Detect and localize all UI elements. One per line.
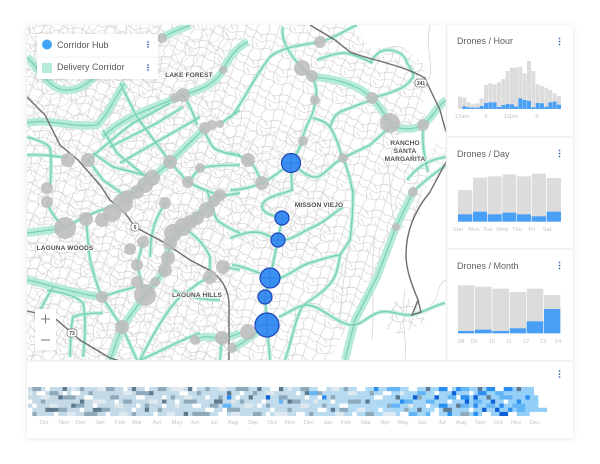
panel: map bbox=[27, 25, 446, 361]
panel: calendar heatmap: Mar bbox=[361, 420, 371, 426]
panel: calendar heatmap: Aug bbox=[456, 420, 466, 426]
panel: calendar heatmap: Jul bbox=[438, 420, 446, 426]
panel: drones per day: Sun bbox=[453, 227, 463, 233]
panel: drones per month: Drones / Month bbox=[457, 261, 519, 271]
panel: calendar heatmap: Dec bbox=[304, 420, 314, 426]
panel: calendar heatmap bbox=[28, 370, 560, 426]
panel: calendar heatmap: Feb bbox=[115, 420, 125, 426]
panel: calendar heatmap: Sep bbox=[248, 420, 258, 426]
highway shields: 73 bbox=[69, 331, 75, 337]
panel: drones per day: Thu bbox=[512, 227, 522, 233]
panel: drones per day: Sat bbox=[543, 227, 552, 233]
legend: Corridor Hub bbox=[57, 40, 109, 50]
panel: drones per hour: 6 bbox=[484, 114, 488, 120]
panel: drones per month bbox=[457, 261, 562, 345]
dividers bbox=[27, 25, 573, 361]
panel: drones per day: Mon bbox=[468, 227, 480, 233]
city labels: MARGARITA bbox=[385, 156, 425, 163]
panel: calendar heatmap: Sep bbox=[475, 420, 485, 426]
panel: calendar heatmap: Mar bbox=[132, 420, 142, 426]
panel: calendar heatmap: Apr bbox=[152, 420, 162, 426]
panel: drones per month: 09 bbox=[471, 339, 477, 345]
city labels: LAKE FOREST bbox=[165, 72, 213, 79]
panel: drones per day: Drones / Day bbox=[457, 149, 510, 159]
city labels: MISSON VIEJO bbox=[295, 202, 343, 209]
panel: calendar heatmap: Nov bbox=[285, 420, 295, 426]
legend bbox=[37, 34, 158, 79]
panel: calendar heatmap: Nov bbox=[511, 420, 521, 426]
panel: calendar heatmap: Jul bbox=[210, 420, 218, 426]
panel: drones per month: 10 bbox=[489, 339, 495, 345]
city labels: LAGUNA HILLS bbox=[172, 292, 223, 299]
panel: calendar heatmap: Jan bbox=[95, 420, 105, 426]
city labels: SANTA bbox=[394, 148, 416, 155]
panel: drones per month: 13 bbox=[540, 339, 546, 345]
panel: drones per month: 12 bbox=[523, 339, 529, 345]
panel: drones per day bbox=[453, 149, 561, 233]
panel: drones per day: Fri bbox=[529, 227, 535, 233]
panel: calendar heatmap: Nov bbox=[59, 420, 69, 426]
panel: calendar heatmap: Oct bbox=[493, 420, 503, 426]
corridor hubs: gray bbox=[41, 33, 429, 353]
panel: calendar heatmap: Jun bbox=[417, 420, 427, 426]
panel: drones per hour: Drones / Hour bbox=[457, 36, 513, 46]
panel: calendar heatmap: May bbox=[172, 420, 183, 426]
panel: drones per day: Tue bbox=[483, 227, 493, 233]
panel: drones per month: 14 bbox=[555, 339, 562, 345]
panel: drones per day: Wed bbox=[496, 227, 508, 233]
corridor hubs: blue bbox=[255, 154, 300, 337]
panel: drones per month: 08 bbox=[458, 339, 464, 345]
highway shields: 241 bbox=[417, 81, 425, 87]
panel: drones per hour: 12pm bbox=[504, 114, 518, 120]
legend: Delivery Corridor bbox=[57, 62, 125, 72]
panel: drones per hour: 6 bbox=[535, 114, 539, 120]
panel: drones per hour bbox=[455, 36, 561, 120]
highway shields bbox=[67, 79, 427, 337]
highways bbox=[27, 25, 446, 361]
city labels: RANCHO bbox=[390, 140, 420, 147]
panel: calendar heatmap: Dec bbox=[76, 420, 86, 426]
panel: calendar heatmap: Aug bbox=[228, 420, 238, 426]
highway shields: 5 bbox=[134, 225, 137, 231]
panel: calendar heatmap: Jun bbox=[190, 420, 200, 426]
panel: drones per month: 11 bbox=[506, 339, 512, 345]
panel: calendar heatmap: May bbox=[398, 420, 409, 426]
panel: calendar heatmap: Oct bbox=[267, 420, 277, 426]
city labels: LAGUNA WOODS bbox=[37, 245, 94, 252]
panel: calendar heatmap: Oct bbox=[39, 420, 49, 426]
city labels bbox=[37, 72, 425, 299]
delivery corridors bbox=[27, 25, 446, 360]
panel: calendar heatmap: Dec bbox=[530, 420, 540, 426]
panel: calendar heatmap: Feb bbox=[341, 420, 351, 426]
panel: drones per hour: 12am bbox=[455, 114, 469, 120]
panel: calendar heatmap: Apr bbox=[380, 420, 390, 426]
zoom controls bbox=[35, 309, 56, 350]
panel: calendar heatmap: Jan bbox=[323, 420, 333, 426]
